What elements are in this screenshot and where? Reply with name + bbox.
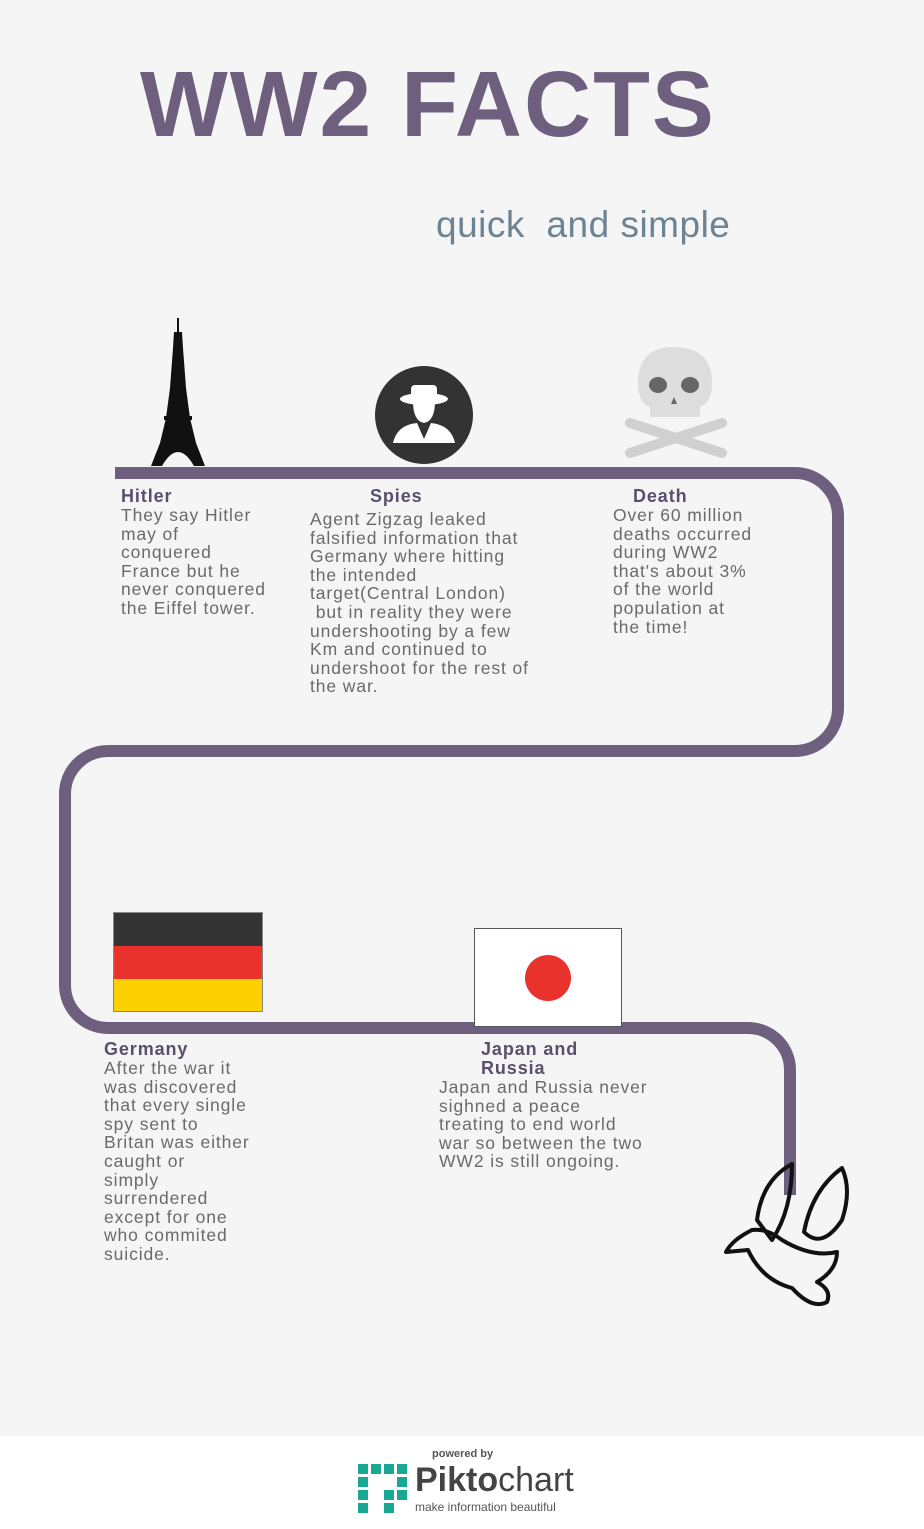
text: death: deaths occurred <box>613 524 752 544</box>
text: spies: Germany where hitting <box>310 546 505 566</box>
text: germany: spy sent to <box>104 1114 199 1134</box>
text: spies: but in reality they were <box>316 602 512 622</box>
text: japan and russia: treating to end world <box>439 1114 616 1134</box>
text: hitler: the Eiffel tower. <box>121 598 256 618</box>
text: japan and russia: war so between the two <box>439 1133 643 1153</box>
subtitle: quick and simple <box>436 204 730 245</box>
text: germany: except for one <box>104 1207 228 1227</box>
text: germany: Britan was either <box>104 1132 250 1152</box>
text: death <box>613 486 752 637</box>
text: spies: the war. <box>310 676 378 696</box>
text: germany: Germany <box>104 1039 188 1059</box>
icon: spy <box>375 366 473 464</box>
text: spies: undershoot for the rest of <box>310 658 529 678</box>
icon: skull <box>625 347 727 458</box>
footer: piktochart <box>0 1436 924 1529</box>
text: germany: suicide. <box>104 1244 171 1264</box>
text: hitler: They say Hitler <box>121 505 251 525</box>
icon: dove <box>724 1162 849 1306</box>
text: germany: surrendered <box>104 1188 208 1208</box>
text: germany: who commited <box>104 1225 228 1245</box>
text: japan and russia: sighned a peace <box>439 1096 581 1116</box>
footer: piktochart: Piktochart <box>415 1461 574 1499</box>
icon: german flag <box>113 912 263 1012</box>
text: spies: Km and continued to <box>310 639 488 659</box>
text: japan and russia: WW2 is still ongoing. <box>439 1151 620 1171</box>
text: spies: falsified information that <box>310 528 518 548</box>
text: death: of the world <box>613 579 714 599</box>
text: germany: that every single <box>104 1095 247 1115</box>
icon: eiffel tower <box>151 318 205 466</box>
text: death: population at <box>613 598 725 618</box>
text: death: the time! <box>613 617 688 637</box>
text: japan and russia: Russia <box>481 1058 545 1078</box>
text: germany: simply <box>104 1170 159 1190</box>
text: germany: After the war it <box>104 1058 231 1078</box>
text: germany: was discovered <box>104 1077 237 1097</box>
text: hitler: never conquered <box>121 579 266 599</box>
footer: piktochart: powered by <box>432 1448 493 1460</box>
text: japan and russia: Japan and Russia never <box>439 1077 648 1097</box>
text: death: during WW2 <box>613 542 718 562</box>
text: hitler: may of <box>121 524 179 544</box>
text: hitler: conquered <box>121 542 212 562</box>
text: death: Death <box>633 486 688 506</box>
text: japan and russia: Japan and <box>481 1039 578 1059</box>
text: spies: the intended <box>310 565 417 585</box>
title: WW2 FACTS <box>140 52 716 156</box>
text: spies: undershooting by a few <box>310 621 511 641</box>
text: spies <box>310 486 529 696</box>
text: japan and russia <box>439 1039 648 1171</box>
text: death: Over 60 million <box>613 505 743 525</box>
text: germany <box>104 1039 250 1264</box>
text: hitler: Hitler <box>121 486 172 506</box>
icon: japan flag <box>474 928 622 1027</box>
text: death: that's about 3% <box>613 561 747 581</box>
text: spies: target(Central London) <box>310 583 506 603</box>
text: spies: Agent Zigzag leaked <box>310 509 487 529</box>
footer: piktochart: make information beautiful <box>415 1500 556 1514</box>
text: spies: Spies <box>370 486 423 506</box>
text: hitler: France but he <box>121 561 241 581</box>
text: hitler <box>121 486 266 618</box>
text: germany: caught or <box>104 1151 185 1171</box>
